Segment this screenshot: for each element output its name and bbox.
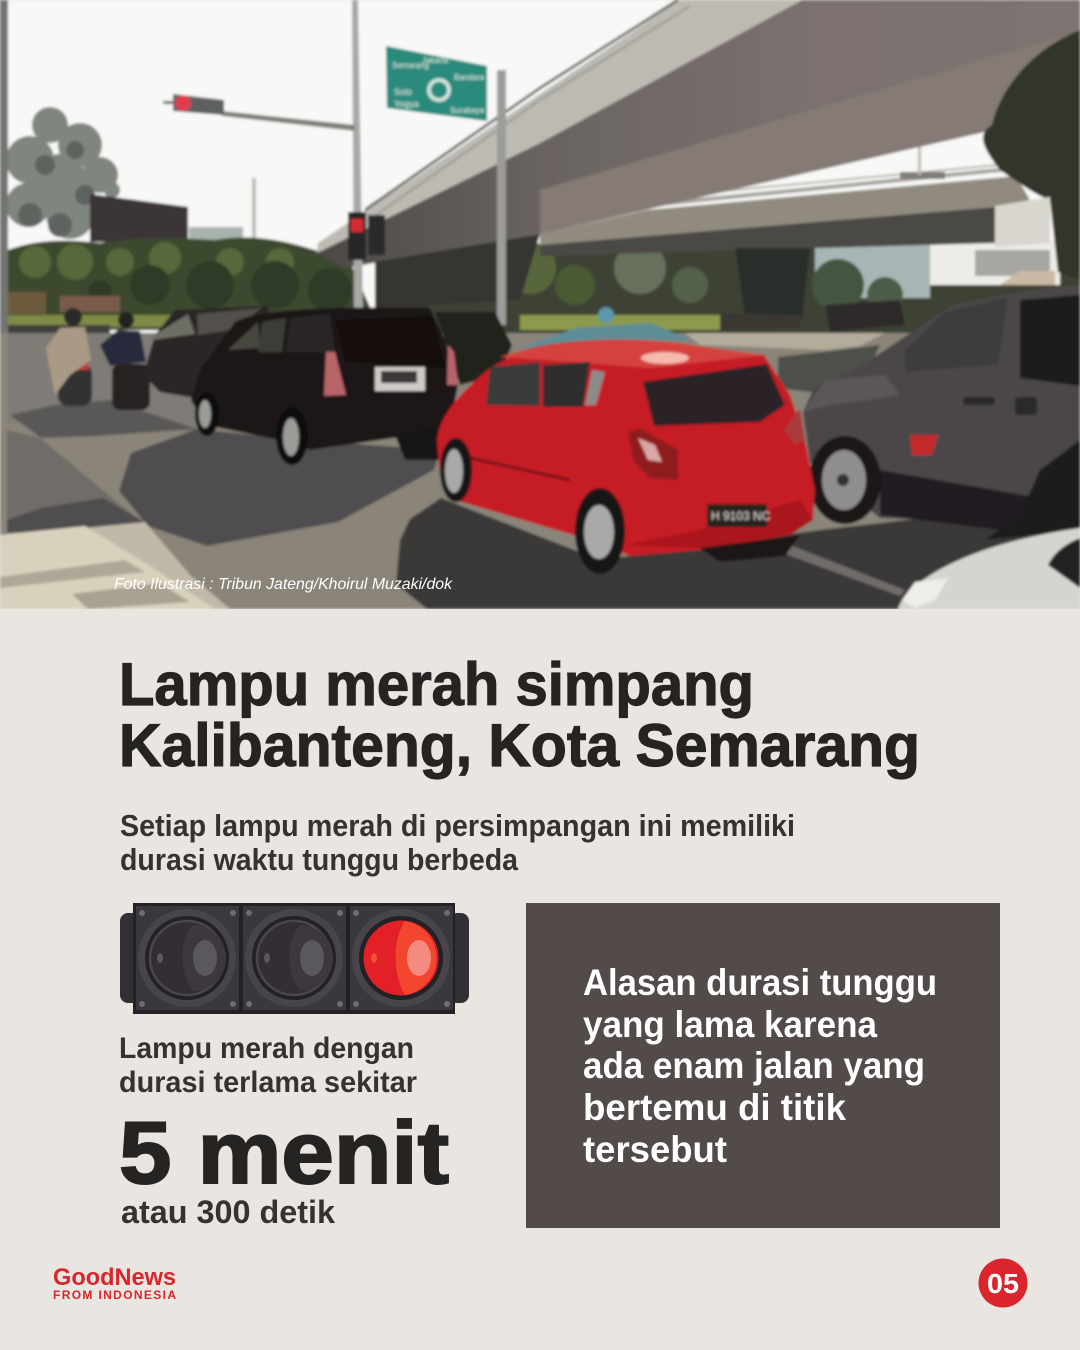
big number: 5 menit: 5 menit <box>119 1103 449 1202</box>
lower flyover <box>540 176 1030 245</box>
teal car roof <box>520 323 692 348</box>
notice sign <box>995 197 1050 247</box>
left pole <box>0 0 10 335</box>
panel: reason: tersebut <box>583 1129 727 1170</box>
white car <box>898 528 1080 609</box>
left caption: Lampu merah dengan <box>119 1032 414 1065</box>
logo: GoodNews from Indonesia: FROM INDONESIA <box>53 1288 176 1302</box>
subtitle <box>120 808 795 877</box>
direction sign <box>386 46 487 121</box>
page number badge: 05 <box>987 1268 1019 1299</box>
right tree <box>983 30 1080 280</box>
photo: traffic queue at Kalibanteng intersection: Solo <box>394 87 412 97</box>
billboards <box>90 194 188 242</box>
logo: GoodNews from Indonesia: GoodNews <box>53 1264 176 1291</box>
subtitle: Setiap lampu merah di persimpangan ini memiliki <box>120 808 795 843</box>
pillar <box>735 248 810 318</box>
photo: traffic queue at Kalibanteng intersection: Surabaya <box>450 106 485 115</box>
motorcycle right <box>985 440 1080 540</box>
seconds note: atau 300 detik <box>121 1194 335 1230</box>
title <box>119 651 920 779</box>
icon: traffic light with red lit <box>120 903 469 1014</box>
far trees band <box>8 238 380 330</box>
black MPV <box>191 308 458 450</box>
title: Lampu merah simpang <box>119 651 754 718</box>
panel: reason: bertemu di titik <box>583 1087 846 1128</box>
photo: traffic queue at Kalibanteng intersection <box>0 0 1080 609</box>
photo credit: Foto Ilustrasi : Tribun Jateng/Khoirul Muzaki/dok <box>114 576 453 593</box>
photo: traffic queue at Kalibanteng intersection: H 9103 NC <box>711 509 771 523</box>
panel: reason: ada enam jalan yang <box>583 1045 925 1086</box>
photo: traffic queue at Kalibanteng intersection: Semarang <box>392 61 429 70</box>
motorcycle riders <box>58 364 92 406</box>
lawn and kerb <box>8 315 170 327</box>
asphalt shadows <box>119 429 440 546</box>
black SUV right <box>435 312 512 385</box>
photo: traffic queue at Kalibanteng intersection: Bandara <box>454 73 485 82</box>
far cars <box>825 300 905 332</box>
left caption <box>119 1032 417 1099</box>
background under flyover <box>375 245 1080 335</box>
page number badge <box>978 1258 1028 1308</box>
red hatchback <box>437 340 815 556</box>
title: Kalibanteng, Kota Semarang <box>119 712 920 779</box>
left caption: durasi terlama sekitar <box>119 1066 417 1099</box>
lower signal heads <box>348 212 366 260</box>
panel: reason <box>526 903 1000 1228</box>
left tree <box>6 107 120 239</box>
photo: traffic queue at Kalibanteng intersection: Yogya <box>394 99 419 109</box>
median <box>685 333 885 350</box>
upper flyover <box>317 0 802 253</box>
panel: reason: Alasan durasi tunggu <box>583 962 937 1003</box>
road <box>0 331 914 609</box>
panel: reason: yang lama karena <box>583 1004 877 1045</box>
dark SUV behind <box>143 306 270 398</box>
grey van <box>803 285 1080 522</box>
kerb and zebra crossing <box>85 522 230 609</box>
main signal pole and arm <box>352 0 363 310</box>
photo: traffic queue at Kalibanteng intersection: Jakarta <box>422 56 449 65</box>
subtitle: durasi waktu tunggu berbeda <box>120 842 519 877</box>
